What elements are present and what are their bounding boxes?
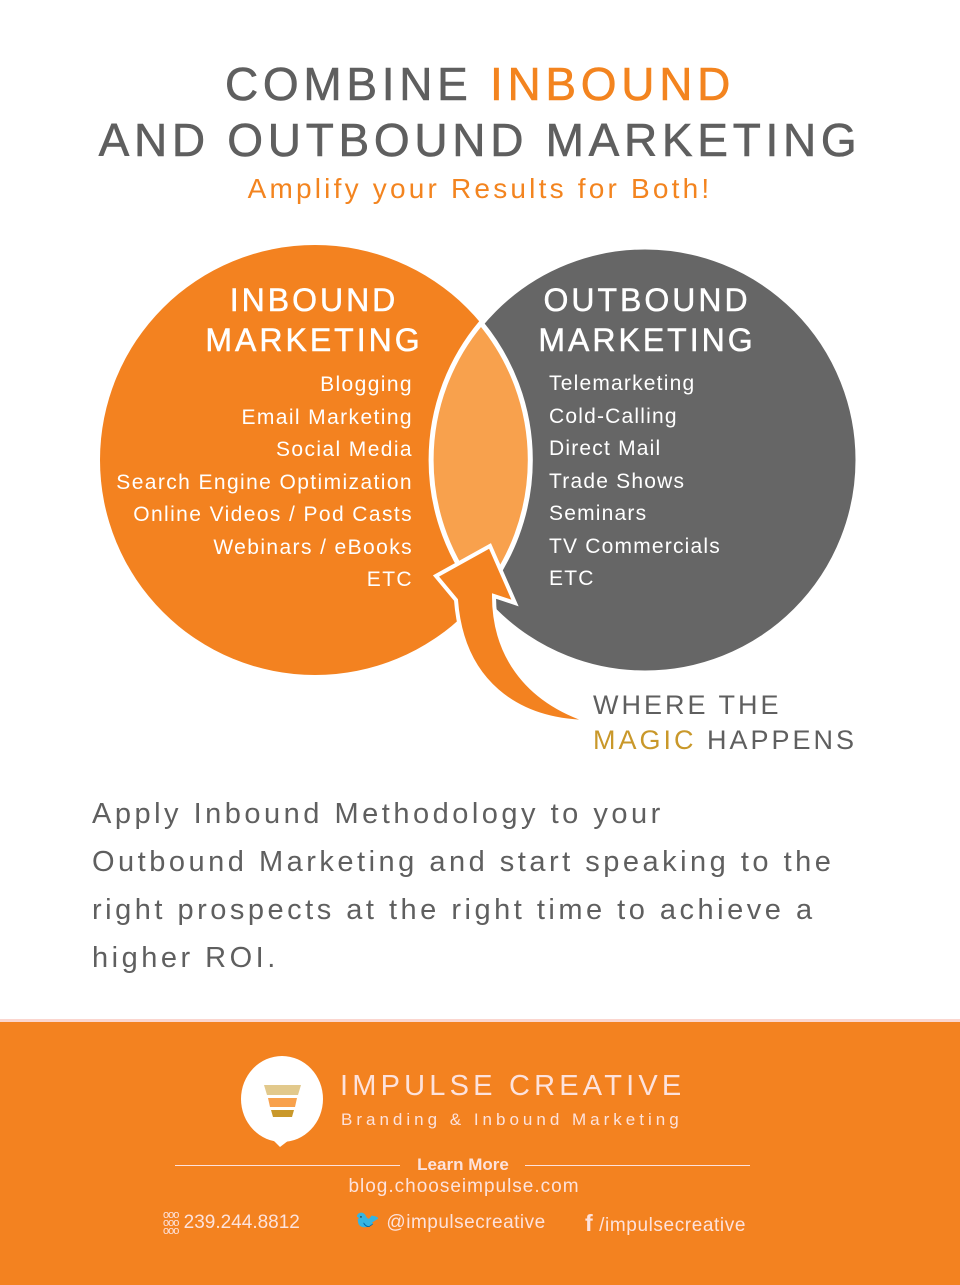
outbound heading: MARKETING — [538, 322, 756, 358]
outbound list: Seminars — [549, 502, 647, 525]
outbound list: Telemarketing — [549, 372, 695, 395]
inbound list: Blogging — [320, 373, 413, 396]
body text: Apply Inbound Methodology to your — [92, 798, 664, 830]
inbound list: Webinars / eBooks — [213, 536, 413, 558]
tagline: Branding & Inbound Marketing — [341, 1110, 683, 1129]
venn diagram — [100, 245, 856, 720]
subtitle: Amplify your Results for Both! — [248, 173, 712, 204]
facebook: f /impulsecreative — [585, 1210, 746, 1236]
inbound heading — [205, 282, 423, 358]
callout: where the magic happens: MAGIC HAPPENS — [593, 725, 857, 755]
body text: right prospects at the right time to achieve a — [92, 894, 816, 926]
arrow — [436, 546, 592, 722]
inbound list: Search Engine Optimization — [116, 470, 413, 494]
inbound list — [116, 373, 413, 591]
logo text: IMPULSE CREATIVE — [340, 1070, 685, 1102]
footer — [0, 1019, 960, 1285]
body text — [92, 798, 834, 974]
title — [98, 58, 861, 166]
phone: ooo — [163, 1209, 178, 1221]
callout: where the magic happens: WHERE THE — [593, 690, 782, 720]
inbound heading: INBOUND — [230, 282, 398, 318]
outbound list — [549, 372, 721, 590]
twitter: 🐦 @impulsecreative — [354, 1210, 546, 1233]
inbound list: Social Media — [276, 438, 413, 461]
logo icon — [241, 1056, 323, 1147]
title: COMBINE INBOUND — [225, 58, 735, 110]
body text: higher ROI. — [92, 942, 279, 974]
phone: ooo — [163, 1217, 178, 1229]
outbound list: Direct Mail — [549, 437, 661, 460]
body text: Outbound Marketing and start speaking to the — [92, 846, 834, 878]
circle: outbound — [432, 247, 858, 673]
callout: where the magic happens — [593, 690, 857, 755]
title: AND OUTBOUND MARKETING — [99, 114, 861, 166]
inbound list: Online Videos / Pod Casts — [133, 503, 413, 526]
outbound list: TV Commercials — [549, 534, 721, 558]
learn more: Learn More — [417, 1155, 509, 1174]
outbound heading — [538, 282, 756, 358]
url: blog.chooseimpulse.com — [348, 1176, 580, 1197]
phone: 239.244.8812 — [184, 1212, 300, 1233]
phone: ooo — [163, 1225, 178, 1237]
outbound list: ETC — [549, 567, 595, 590]
circle: inbound — [100, 245, 530, 675]
outbound list: Cold-Calling — [549, 404, 678, 428]
outbound heading: OUTBOUND — [543, 282, 751, 318]
inbound heading: MARKETING — [205, 322, 423, 358]
phone — [163, 1209, 300, 1237]
inbound list: Email Marketing — [241, 406, 413, 428]
outbound list: Trade Shows — [549, 470, 685, 492]
overlap lens — [431, 323, 530, 597]
inbound list: ETC — [367, 568, 413, 591]
